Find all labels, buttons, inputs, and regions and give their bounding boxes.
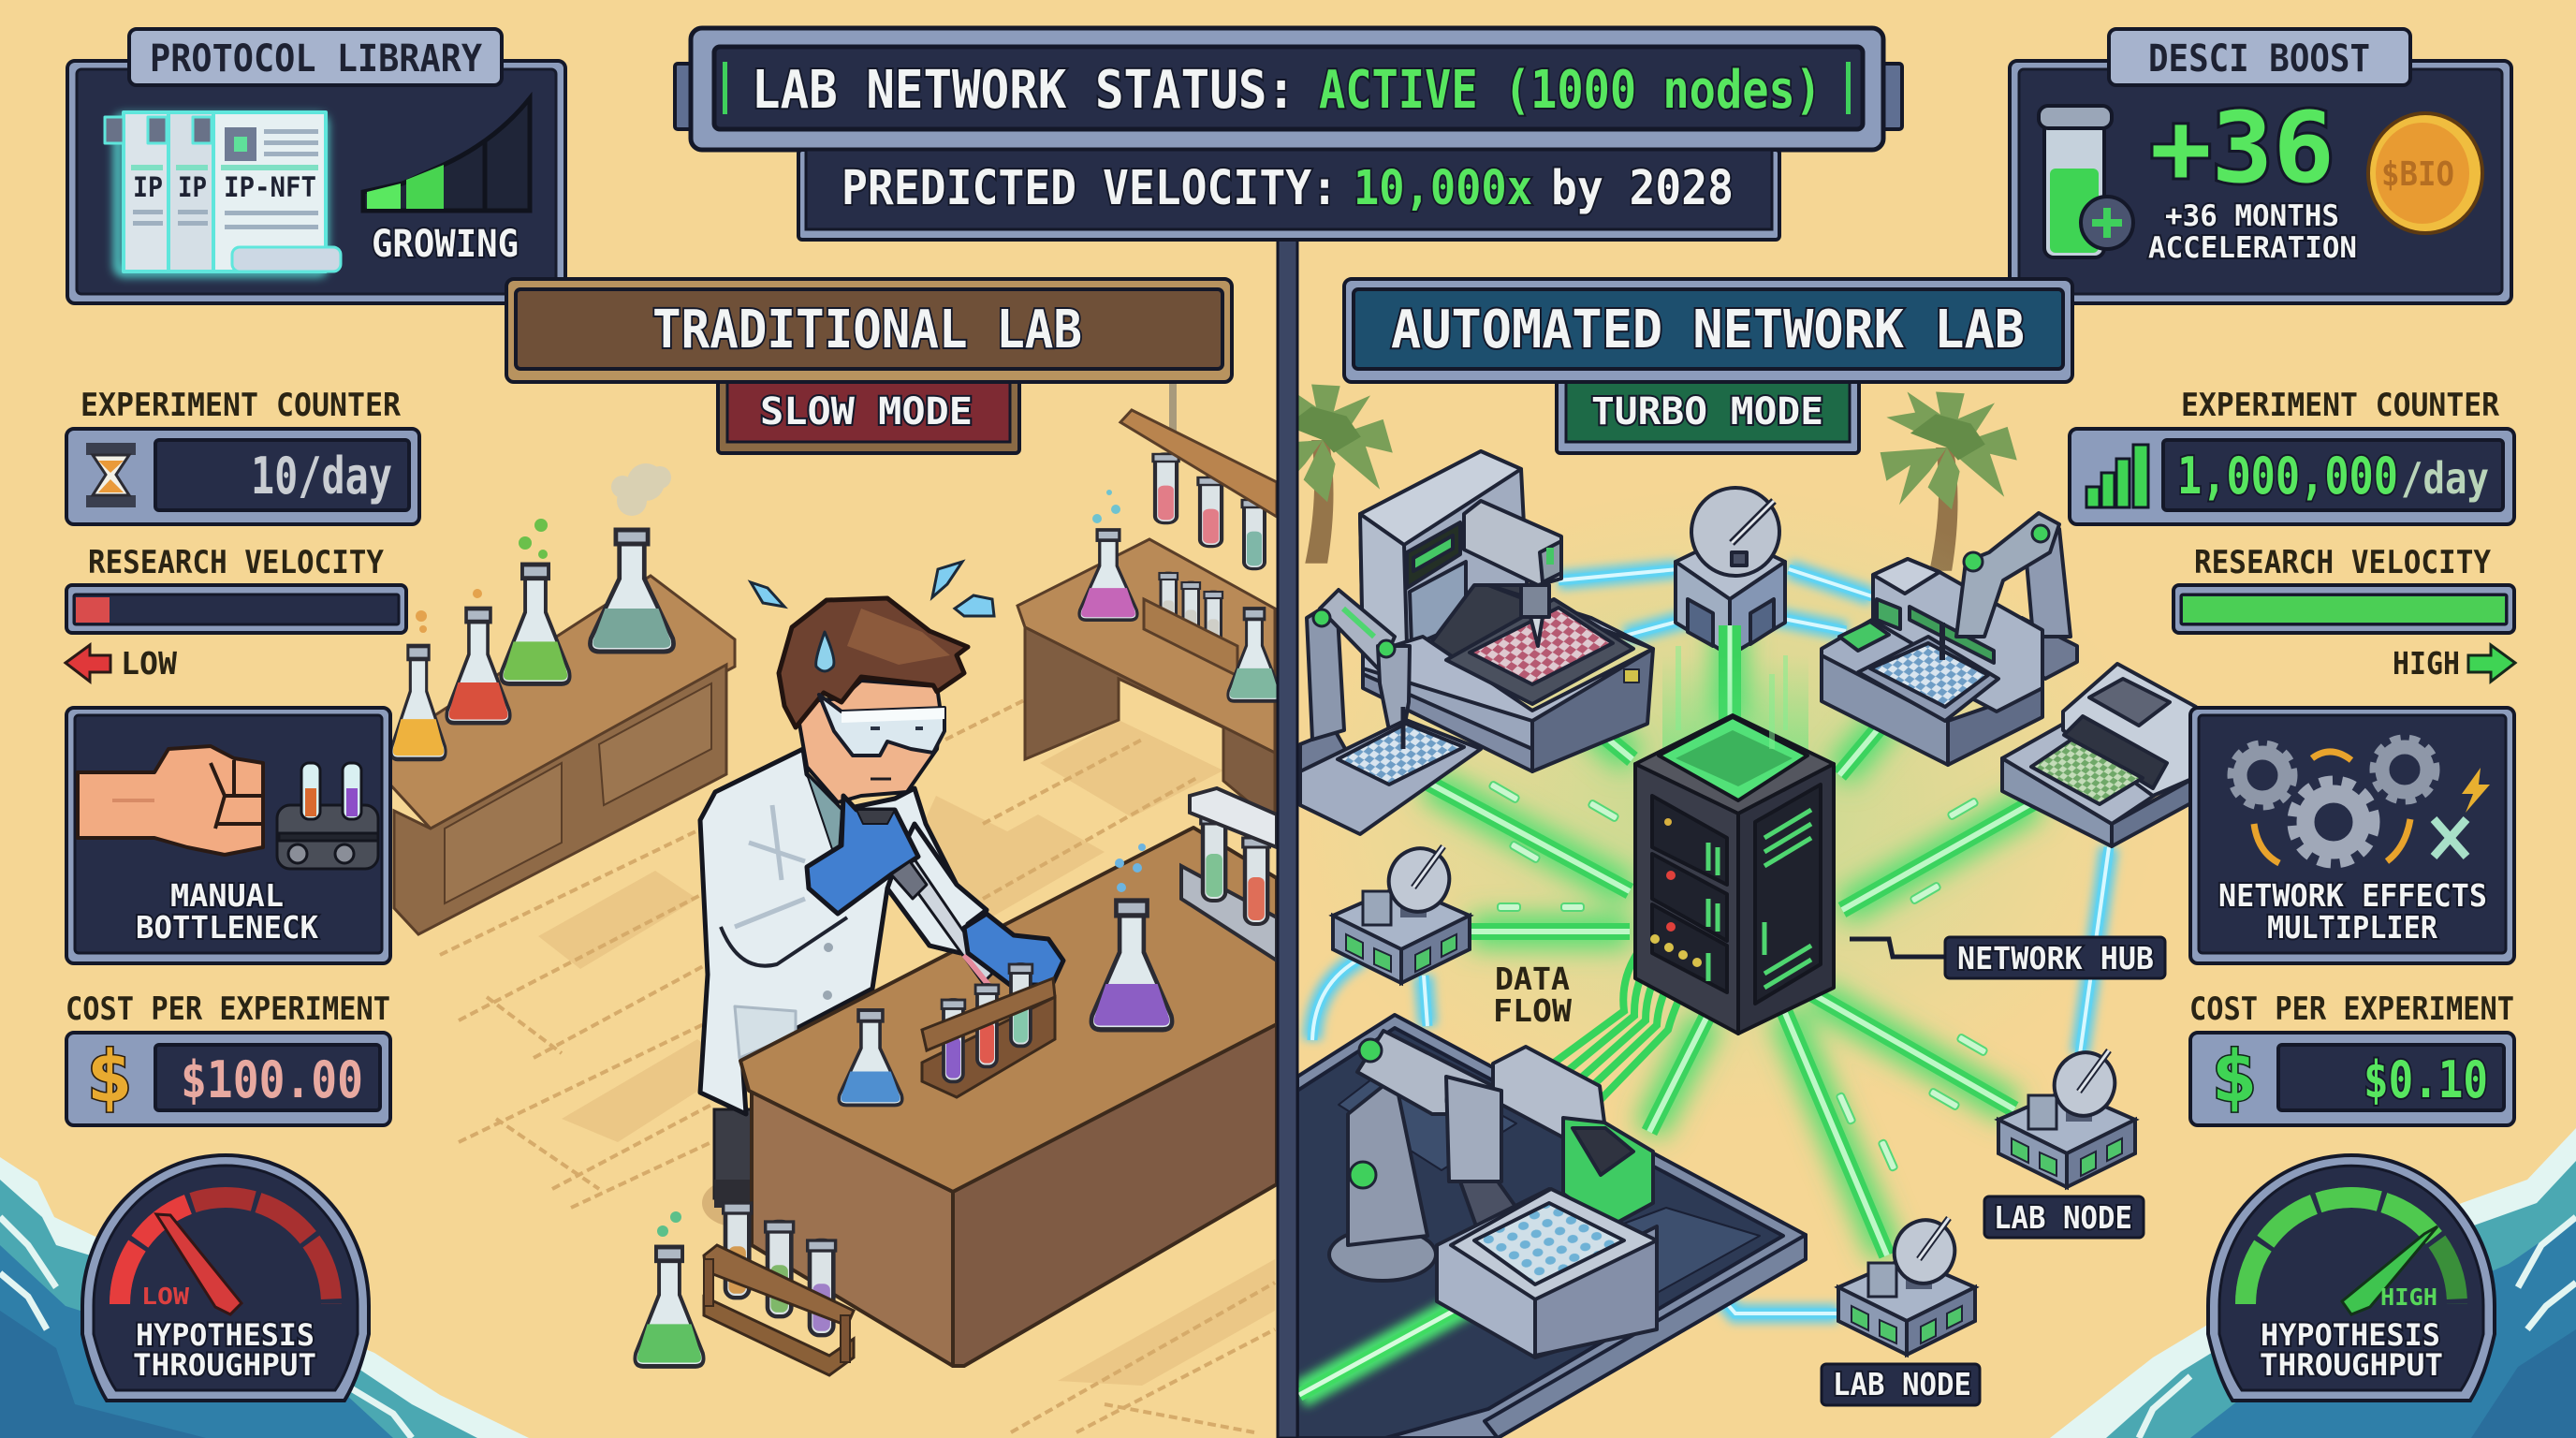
label: experiment counter left: EXPERIMENT COUNTER	[80, 387, 401, 424]
bubbles over purple flask	[1115, 844, 1146, 892]
scientist: head	[779, 598, 968, 802]
chart: growing curve	[363, 98, 530, 211]
counter: $0.10	[2190, 1033, 2514, 1125]
sweat drops	[751, 562, 994, 616]
label: experiment counter right: EXPERIMENT COUNTER	[2181, 387, 2499, 424]
gauge: hypothesis high	[2208, 1155, 2495, 1401]
glow behind network	[1282, 487, 2162, 1123]
counter: 10/day	[66, 429, 419, 524]
data flow label: FLOW	[1493, 992, 1572, 1029]
flask: pink	[1079, 530, 1137, 620]
icon: IP scrolls	[105, 112, 341, 272]
flask: green	[501, 565, 570, 683]
gauge caption: THROUGHPUT	[133, 1347, 316, 1383]
header: predicted velocity	[798, 150, 1779, 240]
green beam on platform	[1299, 1292, 1488, 1395]
counter: 1,000,000/day: 1,000,000	[2177, 447, 2398, 506]
icon: bars	[2086, 445, 2148, 507]
label: network hub: NETWORK HUB	[1957, 940, 2154, 976]
callout line: network hub	[1850, 939, 1945, 957]
icon: dollar: $	[86, 1034, 133, 1118]
icon: IP scrolls: IP-NFT	[224, 171, 316, 203]
icon: IP scrolls: IP	[133, 171, 163, 203]
icon: gears	[2232, 739, 2466, 863]
data flow label	[1493, 961, 1572, 1029]
flask: grey smoking	[590, 530, 674, 652]
beams: cyan links	[1312, 569, 2109, 1313]
panel: desci boost	[2010, 29, 2511, 303]
data flow label: DATA	[1495, 961, 1570, 997]
scientist: coat	[700, 749, 987, 1114]
flask: yellow	[391, 646, 446, 759]
counter: 1,000,000/day	[2070, 429, 2514, 524]
link beam: relay to hub	[1719, 625, 1741, 721]
beams: green data links	[1427, 625, 2037, 1255]
status text: LAB NETWORK STATUS:	[752, 60, 1295, 121]
bench: back-right	[1017, 539, 1275, 824]
sign: slow mode	[718, 378, 1019, 453]
tube rack: right of main bench	[1181, 788, 1277, 961]
gauge high label: HIGH	[2380, 1284, 2437, 1311]
platform base, bottom-left	[1297, 1015, 1806, 1438]
scientist legs	[702, 1109, 768, 1226]
glow above hub	[1676, 646, 1788, 749]
counter: $0.10: $0.10	[2364, 1050, 2488, 1109]
machine: plate printer	[2002, 664, 2196, 846]
label: research velocity right: RESEARCH VELOCITY	[2194, 544, 2491, 581]
bar: research velocity low	[66, 585, 406, 633]
caption: MANUAL	[170, 877, 284, 914]
flask: teal	[1228, 609, 1281, 701]
divider: centre line	[1278, 225, 1297, 1438]
data packets along beams	[1488, 781, 1988, 1171]
gauge caption: THROUGHPUT	[2260, 1347, 2443, 1383]
big number: +36	[2150, 91, 2334, 205]
floor tiles: traditional lab	[440, 697, 1275, 1432]
velocity text: 10,000x	[1354, 161, 1532, 216]
status text	[752, 60, 1822, 121]
panel: network effects multiplier	[2190, 708, 2514, 963]
tab: protocol library: PROTOCOL LIBRARY	[150, 37, 482, 81]
gauge: hypothesis low	[82, 1155, 369, 1401]
velocity text: PREDICTED VELOCITY:	[842, 161, 1338, 216]
bench: main	[740, 828, 1277, 1366]
caption: months acceleration	[2148, 199, 2357, 265]
sign: automated network lab: AUTOMATED NETWORK LAB	[1391, 300, 2025, 360]
sign: traditional lab: TRADITIONAL LAB	[652, 300, 1082, 360]
needle	[156, 1214, 242, 1314]
caption: months acceleration: +36 MONTHS	[2165, 199, 2339, 233]
panel: protocol library	[67, 29, 565, 303]
icon: bolt	[2462, 768, 2490, 813]
ocean: bottom-right shore	[2050, 1128, 2576, 1438]
caption	[136, 877, 318, 946]
robot and plate station	[1329, 1031, 1657, 1357]
caption: months acceleration: ACCELERATION	[2148, 231, 2357, 265]
gauge caption	[133, 1317, 316, 1383]
icon: $BIO coin: $BIO	[2381, 155, 2454, 194]
arrow: low	[66, 645, 110, 682]
label: research velocity left: RESEARCH VELOCITY	[88, 544, 384, 581]
counter: 10/day: 10/day	[251, 447, 392, 506]
gauge arc	[2246, 1197, 2457, 1304]
tab: desci boost	[2109, 29, 2410, 85]
icon: conveyor with tubes	[277, 763, 378, 869]
bench: back-left cabinet	[367, 576, 735, 934]
label: cost per experiment left: COST PER EXPERIMENT	[66, 990, 390, 1028]
lab node: left	[1333, 840, 1470, 983]
velocity text	[842, 161, 1734, 216]
machine: liquid handler	[1360, 451, 1653, 771]
gauge low label: LOW	[141, 1283, 190, 1310]
gauge caption: HYPOTHESIS	[136, 1317, 315, 1353]
header: lab network status	[675, 28, 1902, 150]
lab node: right	[1998, 1044, 2135, 1187]
scientist: arm, gloves and pipette	[807, 796, 1063, 985]
tube rack: back-right bench	[1144, 573, 1237, 676]
smoke and bubbles	[416, 463, 1120, 633]
caption	[2218, 877, 2487, 946]
icon: $BIO coin	[2368, 113, 2482, 233]
caption: MULTIPLIER	[2267, 909, 2437, 946]
icon: dollar green: $	[2211, 1034, 2258, 1118]
counter: $100.00: $100.00	[181, 1050, 363, 1109]
status text: ACTIVE (1000 nodes)	[1319, 60, 1822, 121]
tab: desci boost: DESCI BOOST	[2148, 37, 2370, 81]
label: lab node 1: LAB NODE	[1994, 1199, 2132, 1236]
icon: green vial	[2039, 106, 2133, 257]
arrow: high	[2468, 645, 2515, 682]
counter: 1,000,000/day: /day	[2401, 453, 2489, 504]
data cables	[1535, 942, 1698, 1114]
machine: robotic plate handler	[1822, 513, 2077, 765]
bar: research velocity high	[2174, 585, 2514, 633]
test-tube rack: top-right	[1120, 382, 1277, 569]
label: low: LOW	[121, 645, 177, 682]
label: high: HIGH	[2393, 645, 2460, 682]
label: growing: GROWING	[372, 223, 519, 266]
lab node: bottom	[1838, 1211, 1975, 1355]
beakers on main bench	[839, 901, 1172, 1105]
ocean: bottom-left shore	[0, 1157, 529, 1438]
sign: automated network lab	[1344, 279, 2072, 382]
velocity text: by 2028	[1551, 161, 1734, 216]
label: cost per experiment right: COST PER EXPERIMENT	[2189, 990, 2514, 1028]
icon: IP scrolls: IP	[178, 171, 207, 203]
sign: turbo mode: TURBO MODE	[1591, 390, 1823, 433]
flask: red	[446, 609, 510, 723]
sign: slow mode: SLOW MODE	[760, 390, 973, 433]
palm trees	[1256, 384, 2017, 571]
gauge arc	[120, 1197, 331, 1304]
panel: manual bottleneck	[66, 708, 390, 963]
counter: $100.00	[66, 1033, 390, 1125]
satellite relay	[1676, 477, 1790, 655]
floor rack and flask	[635, 1203, 854, 1375]
label: lab node 2: LAB NODE	[1833, 1366, 1971, 1402]
sign: turbo mode	[1557, 378, 1859, 453]
gauge caption: HYPOTHESIS	[2261, 1317, 2440, 1353]
server: network hub	[1635, 655, 1834, 1034]
machine: small robot arm with plate	[1300, 590, 1481, 834]
caption: NETWORK EFFECTS	[2218, 877, 2487, 914]
sign: traditional lab	[506, 279, 1232, 382]
caption: BOTTLENECK	[136, 909, 318, 946]
icon: fist	[78, 746, 263, 855]
needle	[2342, 1226, 2437, 1314]
icon: hourglass	[86, 443, 136, 507]
gauge caption	[2260, 1317, 2443, 1383]
test tube rack on bench	[922, 964, 1055, 1097]
